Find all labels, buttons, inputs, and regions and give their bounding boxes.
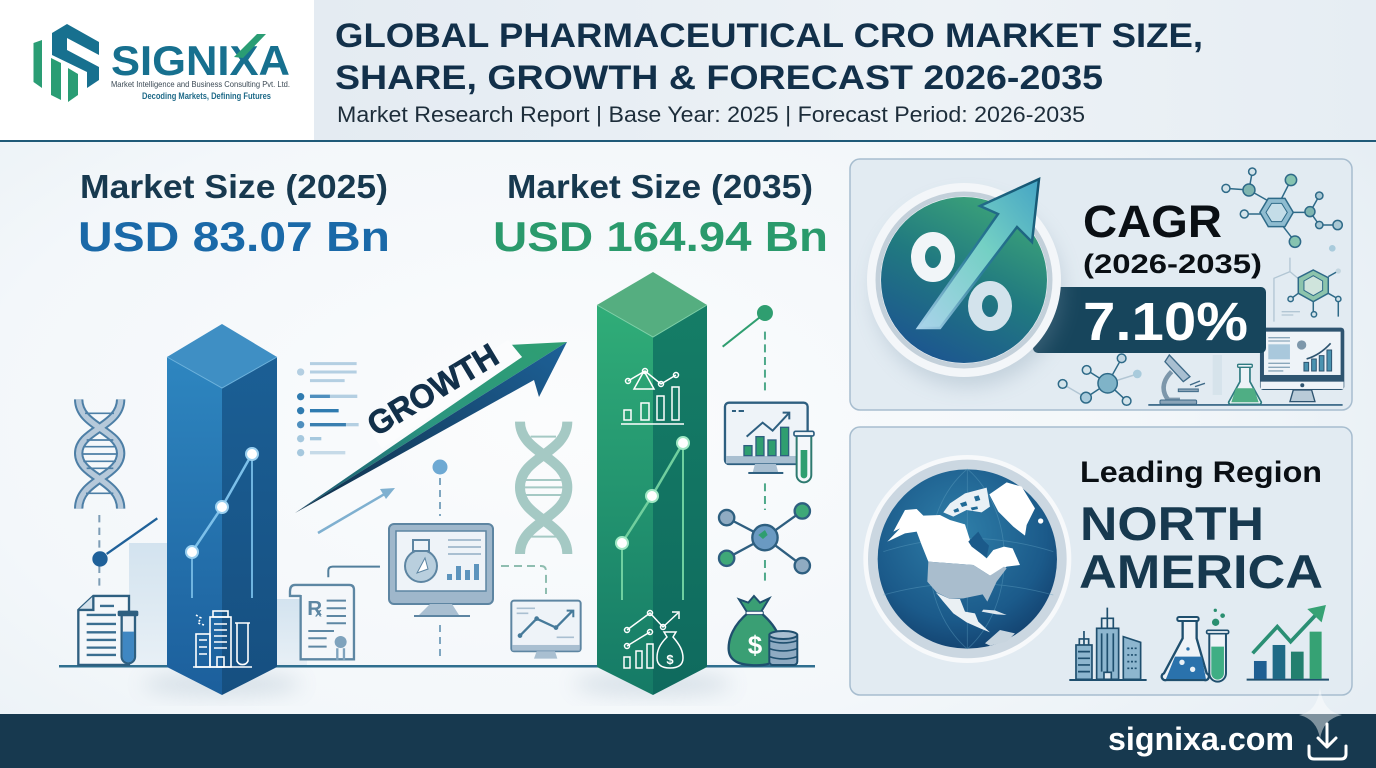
icon: monitor with green chart and test tube <box>725 403 814 482</box>
icon: prescription certificate <box>290 567 380 660</box>
logo: Signixa: Decoding Markets, Defining Futures <box>142 91 271 101</box>
blue column 2025 <box>167 324 277 695</box>
header band <box>0 0 1376 142</box>
stat: market size 2025: Market Size (2025) <box>80 168 388 205</box>
footer band <box>0 714 1376 768</box>
logo: Signixa <box>34 24 290 102</box>
column line chart <box>186 448 258 598</box>
baseline <box>59 665 815 668</box>
icon: sparkle <box>1299 688 1342 739</box>
list of bullets <box>297 364 359 456</box>
icon: report monitor <box>1260 328 1344 402</box>
logo: Signixa: SIGNIXA <box>111 37 290 84</box>
icon: prescription certificate: R <box>307 597 322 620</box>
icon: money bag and coins: $ <box>748 630 763 660</box>
text: region name: AMERICA <box>1079 545 1323 598</box>
icon: growth chart and money bag: $ <box>666 652 674 667</box>
panel: leading region <box>850 427 1352 695</box>
text: CAGR value: 7.10% <box>1083 292 1248 352</box>
text: region name <box>1079 497 1323 598</box>
connector: green dot <box>723 305 773 584</box>
icon: molecule right <box>1274 245 1341 322</box>
panel: CAGR <box>850 159 1352 410</box>
title <box>335 17 1203 97</box>
title: SHARE, GROWTH & FORECAST 2026-2035 <box>335 59 1103 97</box>
icon: microscope and flask <box>1148 355 1343 405</box>
text: CAGR label: (2026-2035) <box>1083 249 1262 279</box>
icon: document and test tube <box>78 596 138 665</box>
icon: blue DNA helix <box>79 399 121 509</box>
small arrow <box>318 488 395 533</box>
dashed connector <box>501 566 546 594</box>
green column 2035 <box>597 272 707 695</box>
icon: molecule top <box>1222 168 1342 247</box>
icon: money bag and coins <box>729 596 797 665</box>
stat: market size 2035: USD 164.94 Bn <box>493 213 828 260</box>
icon: growth chart and money bag <box>624 610 683 668</box>
column line chart <box>616 437 689 600</box>
icon: flask and bars <box>621 368 684 424</box>
stat: market size 2025: USD 83.07 Bn <box>78 213 390 260</box>
column shadows <box>142 672 733 696</box>
icon: lab monitor <box>389 460 493 660</box>
chip: CAGR value <box>1033 287 1266 353</box>
logo: Signixa: Market Intelligence and Business Consulting Pvt. Ltd. <box>111 79 290 89</box>
icon: green DNA helix <box>520 422 567 554</box>
arrow: growth <box>295 336 567 513</box>
arrow: growth: GROWTH <box>361 336 505 443</box>
text: CAGR label: CAGR <box>1083 196 1222 247</box>
icon: small trend monitor <box>511 601 581 659</box>
icon: flask and tube <box>1162 609 1229 682</box>
icon: globe <box>863 455 1071 663</box>
icon: prescription certificate: x <box>315 606 322 620</box>
connector: dot and dashes <box>92 515 157 588</box>
icon: molecule bottom <box>1058 354 1142 405</box>
icon: percent badge <box>867 179 1063 387</box>
subtitle: Market Research Report | Base Year: 2025 | Forecast Period: 2026-2035 <box>337 102 1085 127</box>
footer url: signixa.com <box>1108 721 1294 757</box>
stat: market size 2035: Market Size (2035) <box>507 168 813 205</box>
text: leading region label: Leading Region <box>1080 456 1322 489</box>
text: CAGR label <box>1083 196 1262 279</box>
stat: market size 2025 <box>78 168 390 260</box>
icon: download <box>1309 724 1346 759</box>
title: GLOBAL PHARMACEUTICAL CRO MARKET SIZE, <box>335 17 1203 55</box>
icon: growth chart <box>1247 605 1329 680</box>
icon: city <box>1069 608 1147 680</box>
pale background bars <box>129 543 307 667</box>
text: region name: NORTH <box>1080 497 1264 550</box>
icon: network <box>719 503 810 573</box>
stat: market size 2035 <box>493 168 828 260</box>
icon: city and test tube <box>193 611 252 667</box>
